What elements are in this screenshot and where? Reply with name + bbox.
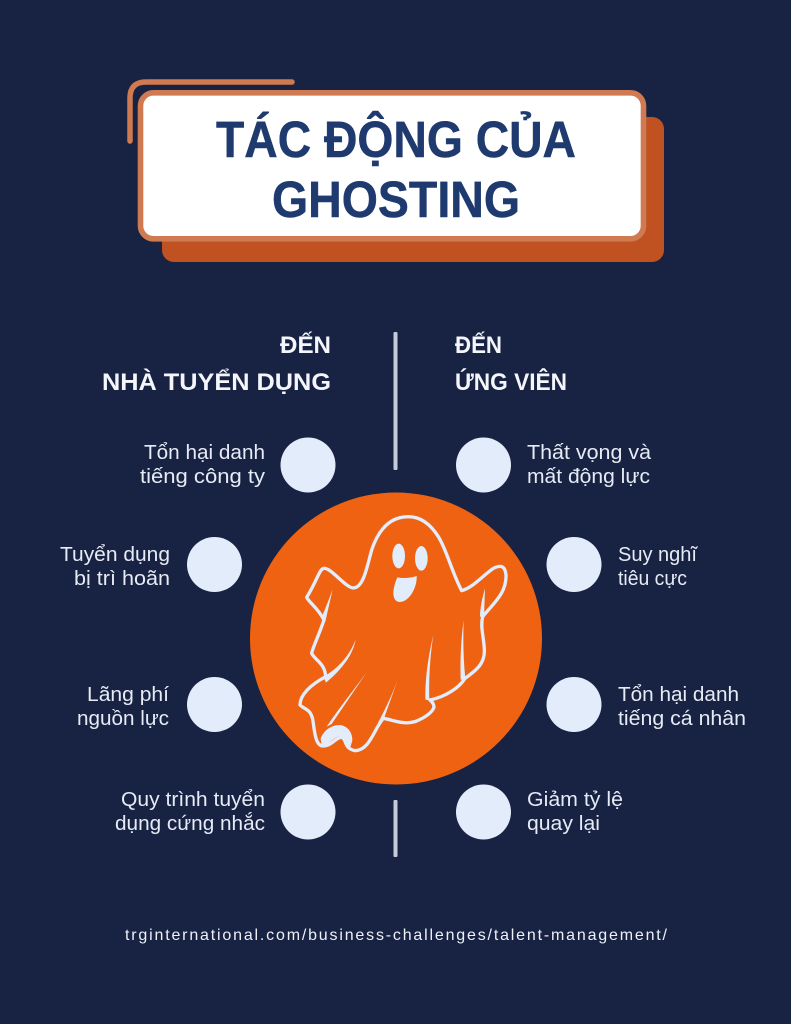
item: rigid recruiting process bbox=[115, 784, 336, 840]
ghost right eye bbox=[415, 546, 428, 571]
title: TÁC ĐỘNG CỦA bbox=[216, 110, 576, 168]
corner bracket accent bbox=[130, 82, 292, 141]
banner card bbox=[140, 93, 644, 239]
heading: to candidates: ĐẾN bbox=[455, 331, 502, 359]
footer url: trginternational.com/business-challenges/talent-management/ bbox=[125, 927, 668, 944]
banner shadow block bbox=[162, 117, 664, 262]
ghost left eye bbox=[392, 544, 405, 568]
heading: to employers: NHÀ TUYỂN DỤNG bbox=[102, 368, 331, 396]
item: personal reputation damage: Tổn hại danh bbox=[618, 684, 739, 706]
item: delayed hiring: Tuyển dụng bbox=[60, 544, 170, 566]
item: wasted resources bbox=[77, 677, 242, 732]
orange circle bbox=[250, 492, 542, 784]
ghost mouth bbox=[393, 576, 417, 602]
item: personal reputation damage: tiếng cá nhân bbox=[618, 708, 746, 730]
item: personal reputation damage bbox=[546, 677, 746, 732]
ghost fabric folds bbox=[322, 588, 485, 727]
item: wasted resources: Lãng phí bbox=[87, 684, 169, 706]
item: rigid recruiting process: Quy trình tuyển bbox=[121, 789, 265, 811]
heading: to employers: ĐẾN bbox=[280, 331, 331, 359]
item: disappointment and lost motivation: Thất vọng và bbox=[527, 442, 652, 464]
heading: to candidates bbox=[455, 331, 567, 396]
item: negative thinking: Suy nghĩ bbox=[618, 544, 698, 566]
top centre divider bbox=[394, 332, 398, 470]
ghost lower-left hem fill bbox=[321, 725, 352, 748]
heading: to employers bbox=[102, 331, 331, 396]
item: company reputation damage: tiếng công ty bbox=[140, 466, 265, 488]
item: reduced return rate: Giảm tỷ lệ bbox=[527, 789, 623, 811]
item: delayed hiring bbox=[60, 537, 242, 592]
panel: title banner bbox=[130, 82, 664, 262]
item: negative thinking: tiêu cực bbox=[618, 568, 687, 590]
icon: ghost bbox=[300, 517, 506, 751]
item: negative thinking bbox=[546, 537, 698, 592]
item: delayed hiring: bị trì hoãn bbox=[74, 568, 170, 590]
item: disappointment and lost motivation: mất động lực bbox=[527, 466, 650, 488]
title: GHOSTING bbox=[272, 171, 520, 228]
heading: to candidates: ỨNG VIÊN bbox=[455, 368, 567, 396]
item: rigid recruiting process: dụng cứng nhắc bbox=[115, 812, 265, 835]
bottom centre divider bbox=[394, 800, 398, 857]
central circle with ghost bbox=[250, 492, 542, 784]
item: wasted resources: nguồn lực bbox=[77, 708, 169, 730]
title bbox=[216, 110, 576, 228]
item: company reputation damage: Tổn hại danh bbox=[144, 442, 265, 464]
item: reduced return rate bbox=[456, 784, 623, 840]
item: disappointment and lost motivation bbox=[456, 438, 652, 492]
item: reduced return rate: quay lại bbox=[527, 813, 600, 835]
item: company reputation damage bbox=[140, 438, 336, 492]
